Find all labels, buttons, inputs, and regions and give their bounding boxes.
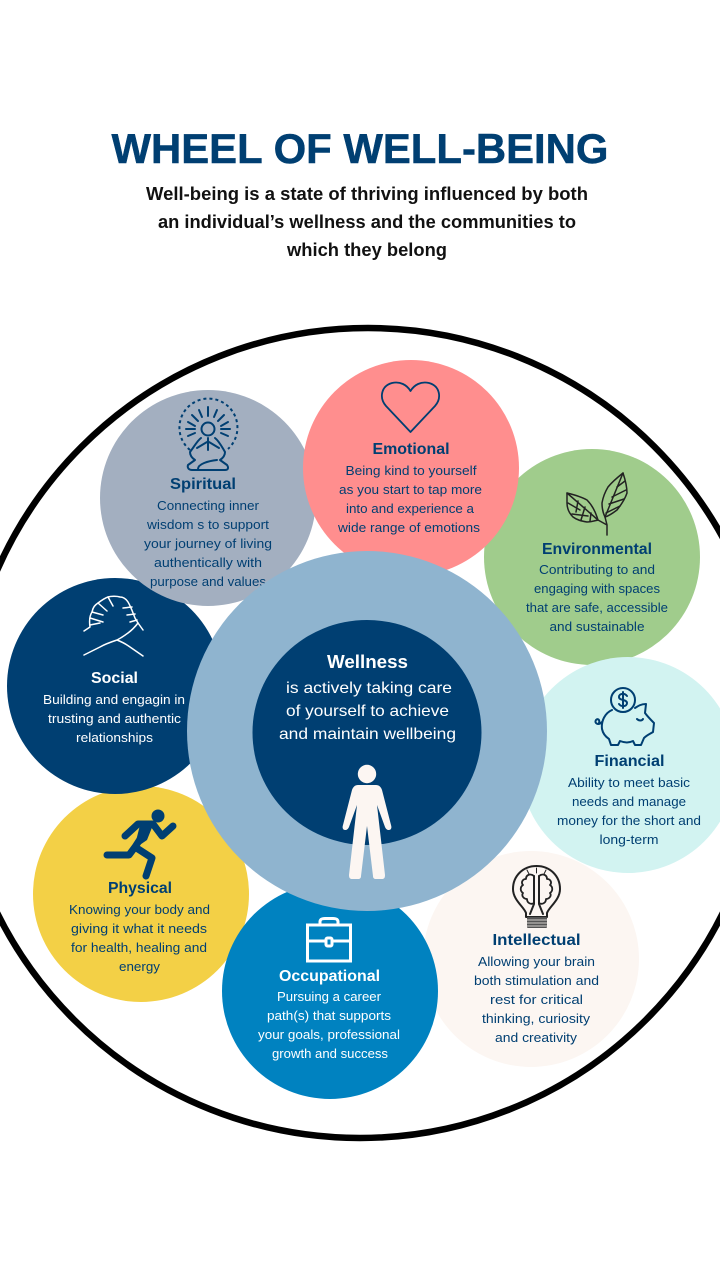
text: wellness description: and maintain wellbeing: [279, 726, 456, 743]
panel: emotional: [303, 360, 519, 576]
text: social description: Building and engagin in: [43, 692, 185, 707]
panel: occupational: [222, 883, 438, 1099]
icon: person: [343, 765, 391, 879]
subtitle: Well-being is a state of thriving influenced by both: [146, 184, 588, 204]
text: wellness description: of yourself to achieve: [286, 703, 449, 720]
text: spiritual description: authentically with: [154, 555, 262, 570]
text: social description: trusting and authentic: [48, 711, 182, 726]
text: financial description: needs and manage: [572, 794, 686, 809]
text: environmental description: that are safe, accessible: [526, 600, 668, 615]
text: spiritual description: wisdom s to support: [146, 517, 269, 532]
text: occupational description: path(s) that supports: [267, 1008, 392, 1023]
text: financial description: Ability to meet basic: [568, 775, 691, 790]
text: spiritual description: your journey of living: [144, 536, 272, 551]
text: social description: relationships: [76, 730, 154, 745]
text: emotional description: into and experience a: [346, 501, 475, 516]
panel: financial: [520, 657, 720, 873]
heading: financial: Financial: [594, 753, 664, 770]
text: wellness description: [279, 680, 456, 743]
text: intellectual description: rest for critical: [490, 992, 583, 1007]
icon: piggy bank: [595, 688, 654, 745]
text: intellectual description: thinking, curiosity: [482, 1011, 591, 1026]
text: financial description: long-term: [600, 832, 658, 847]
icon: meditating figure: [179, 399, 237, 470]
text: physical description: for health, healing and: [71, 940, 207, 955]
text: spiritual description: [144, 498, 272, 589]
text: intellectual description: Allowing your brain: [478, 954, 595, 969]
text: intellectual description: and creativity: [495, 1030, 578, 1045]
heading: social: Social: [91, 670, 138, 687]
text: emotional description: Being kind to yourself: [346, 463, 477, 478]
icon: brain light bulb: [513, 866, 560, 928]
panel: intellectual: [423, 851, 639, 1067]
subtitle: which they belong: [286, 240, 447, 260]
text: occupational description: Pursuing a career: [277, 989, 382, 1004]
icon: runner: [107, 810, 173, 876]
text: financial description: [557, 775, 701, 847]
heading: emotional: Emotional: [372, 441, 450, 458]
text: physical description: energy: [119, 959, 161, 974]
heading: intellectual: Intellectual: [492, 932, 580, 949]
subtitle: an individual’s wellness and the communities to: [158, 212, 576, 232]
icon: clasped hands: [84, 596, 143, 656]
heading: occupational: Occupational: [279, 968, 380, 985]
heading: spiritual: Spiritual: [170, 476, 236, 493]
heading: physical: Physical: [108, 880, 172, 897]
text: occupational description: [258, 989, 400, 1061]
text: emotional description: wide range of emotions: [337, 520, 481, 535]
text: physical description: [69, 902, 210, 974]
text: physical description: giving it what it needs: [71, 921, 208, 936]
title: WHEEL OF WELL-BEING: [112, 125, 608, 172]
text: emotional description: [337, 463, 482, 535]
text: environmental description: Contributing to and: [539, 562, 655, 577]
icon: leaves: [567, 473, 627, 535]
text: intellectual description: [474, 954, 599, 1045]
text: environmental description: engaging with spaces: [534, 581, 661, 596]
text: environmental description: and sustainable: [550, 619, 644, 634]
heading: environmental: Environmental: [542, 541, 652, 558]
text: occupational description: your goals, professional: [258, 1027, 400, 1042]
outer wheel ring: [0, 328, 720, 1138]
text: spiritual description: Connecting inner: [157, 498, 260, 513]
panel: environmental: [484, 449, 700, 665]
text: intellectual description: both stimulation and: [474, 973, 599, 988]
text: social description: [43, 692, 185, 745]
text: emotional description: as you start to tap more: [339, 482, 482, 497]
heading: wellness: Wellness: [327, 652, 408, 672]
panel: social: [7, 578, 223, 794]
text: wellness description: is actively taking care: [286, 680, 452, 697]
text: environmental description: [526, 562, 668, 634]
icon: heart: [382, 382, 439, 432]
text: spiritual description: purpose and values: [150, 574, 266, 589]
panel: wellness centre: [187, 551, 547, 911]
text: occupational description: growth and success: [272, 1046, 388, 1061]
text: physical description: Knowing your body and: [69, 902, 210, 917]
icon: briefcase: [308, 918, 350, 961]
panel: physical: [33, 786, 249, 1002]
subtitle: [146, 184, 588, 260]
panel: spiritual: [100, 390, 316, 606]
text: financial description: money for the short and: [557, 813, 701, 828]
